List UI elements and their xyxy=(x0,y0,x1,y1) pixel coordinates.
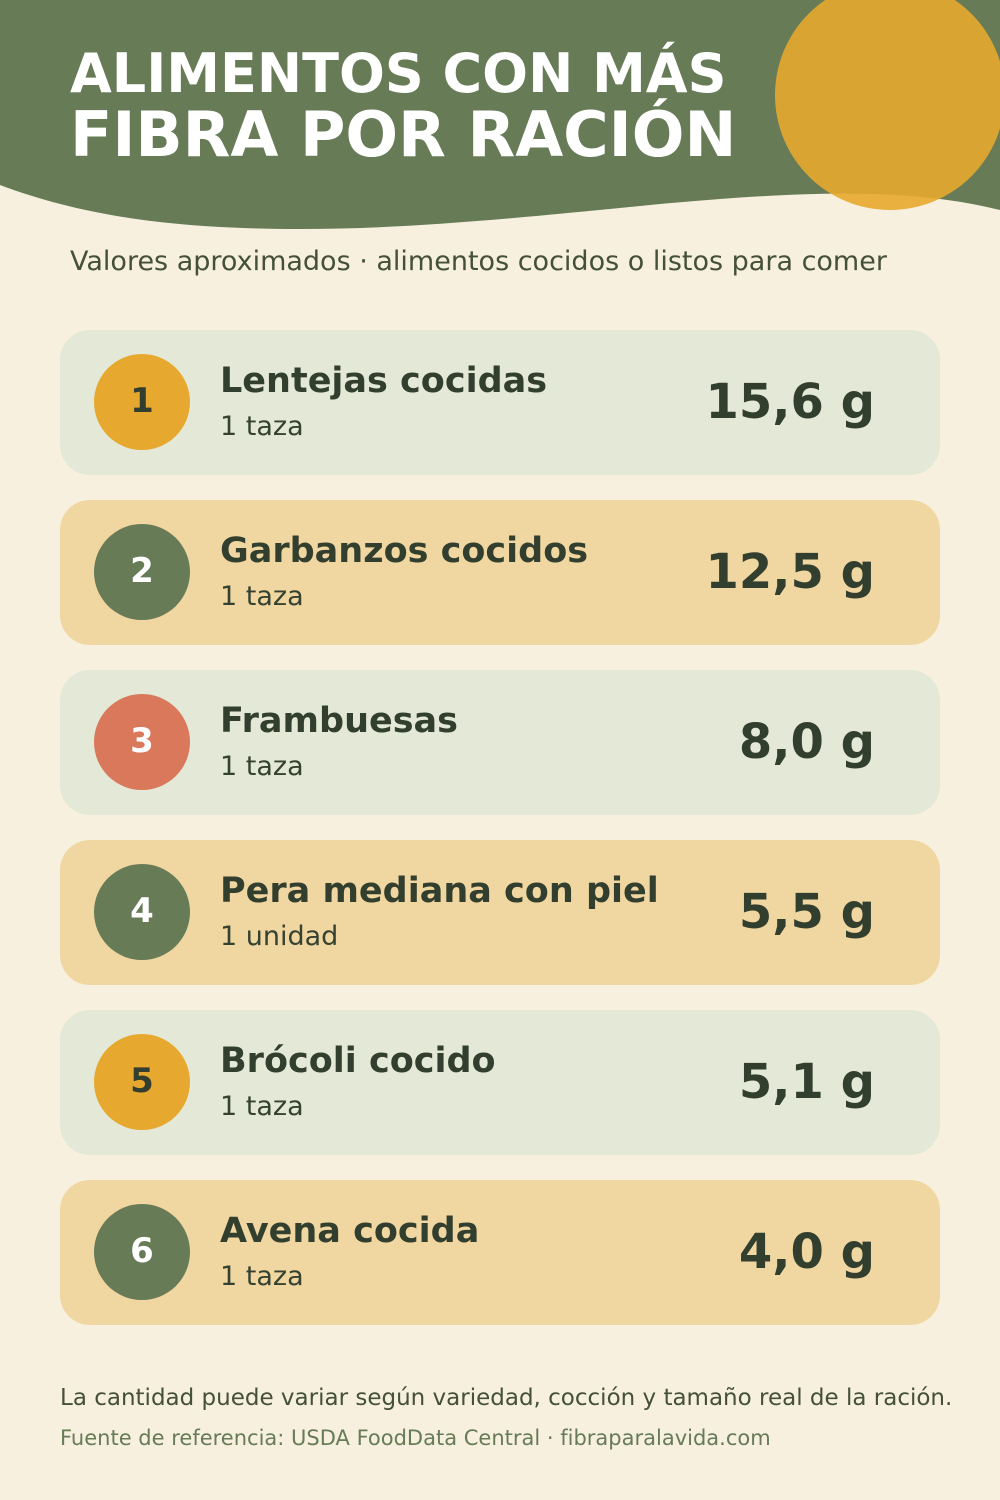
item 5: brócoli xyxy=(60,1010,940,1155)
item 6: avena xyxy=(60,1180,940,1325)
item 3: frambuesas: Frambuesas xyxy=(220,701,458,741)
item 6: avena: 6 xyxy=(130,1231,154,1271)
item 2: garbanzos: 12,5 g xyxy=(706,544,875,600)
decorative sun circle xyxy=(775,0,1000,210)
item 2: garbanzos: 1 taza xyxy=(220,581,304,612)
item 5: brócoli: 1 taza xyxy=(220,1091,304,1122)
item 4: pera: 1 unidad xyxy=(220,921,338,952)
title xyxy=(70,42,736,171)
item 1: lentejas: Lentejas cocidas xyxy=(220,361,547,401)
food list xyxy=(60,330,940,1325)
item 3: frambuesas xyxy=(60,670,940,815)
item 5: brócoli: 5,1 g xyxy=(739,1054,875,1110)
item 4: pera: Pera mediana con piel xyxy=(220,871,659,911)
footnote: La cantidad puede variar según variedad, cocción y tamaño real de la ración. xyxy=(60,1385,952,1411)
item 2: garbanzos xyxy=(60,500,940,645)
item 6: avena: Avena cocida xyxy=(220,1211,479,1251)
item 4: pera xyxy=(60,840,940,985)
item 5: brócoli: 5 xyxy=(130,1061,154,1101)
item 3: frambuesas: 3 xyxy=(130,721,154,761)
title: FIBRA POR RACIÓN xyxy=(70,98,736,171)
item 1: lentejas: 15,6 g xyxy=(706,374,875,430)
item 6: avena: 1 taza xyxy=(220,1261,304,1292)
item 3: frambuesas: 8,0 g xyxy=(739,714,875,770)
item 4: pera: 5,5 g xyxy=(739,884,875,940)
item 1: lentejas: 1 xyxy=(130,381,154,421)
item 2: garbanzos: 2 xyxy=(130,551,154,591)
header wave xyxy=(0,0,1000,229)
item 5: brócoli: Brócoli cocido xyxy=(220,1041,496,1081)
item 1: lentejas: 1 taza xyxy=(220,411,304,442)
title: ALIMENTOS CON MÁS xyxy=(70,42,726,105)
item 6: avena: 4,0 g xyxy=(739,1224,875,1280)
item 4: pera: 4 xyxy=(130,891,154,931)
item 2: garbanzos: Garbanzos cocidos xyxy=(220,531,588,571)
source: Fuente de referencia: USDA FoodData Central · fibraparalavida.com xyxy=(60,1426,771,1450)
item 1: lentejas xyxy=(60,330,940,475)
item 3: frambuesas: 1 taza xyxy=(220,751,304,782)
subtitle: Valores aproximados · alimentos cocidos o listos para comer xyxy=(70,246,888,277)
